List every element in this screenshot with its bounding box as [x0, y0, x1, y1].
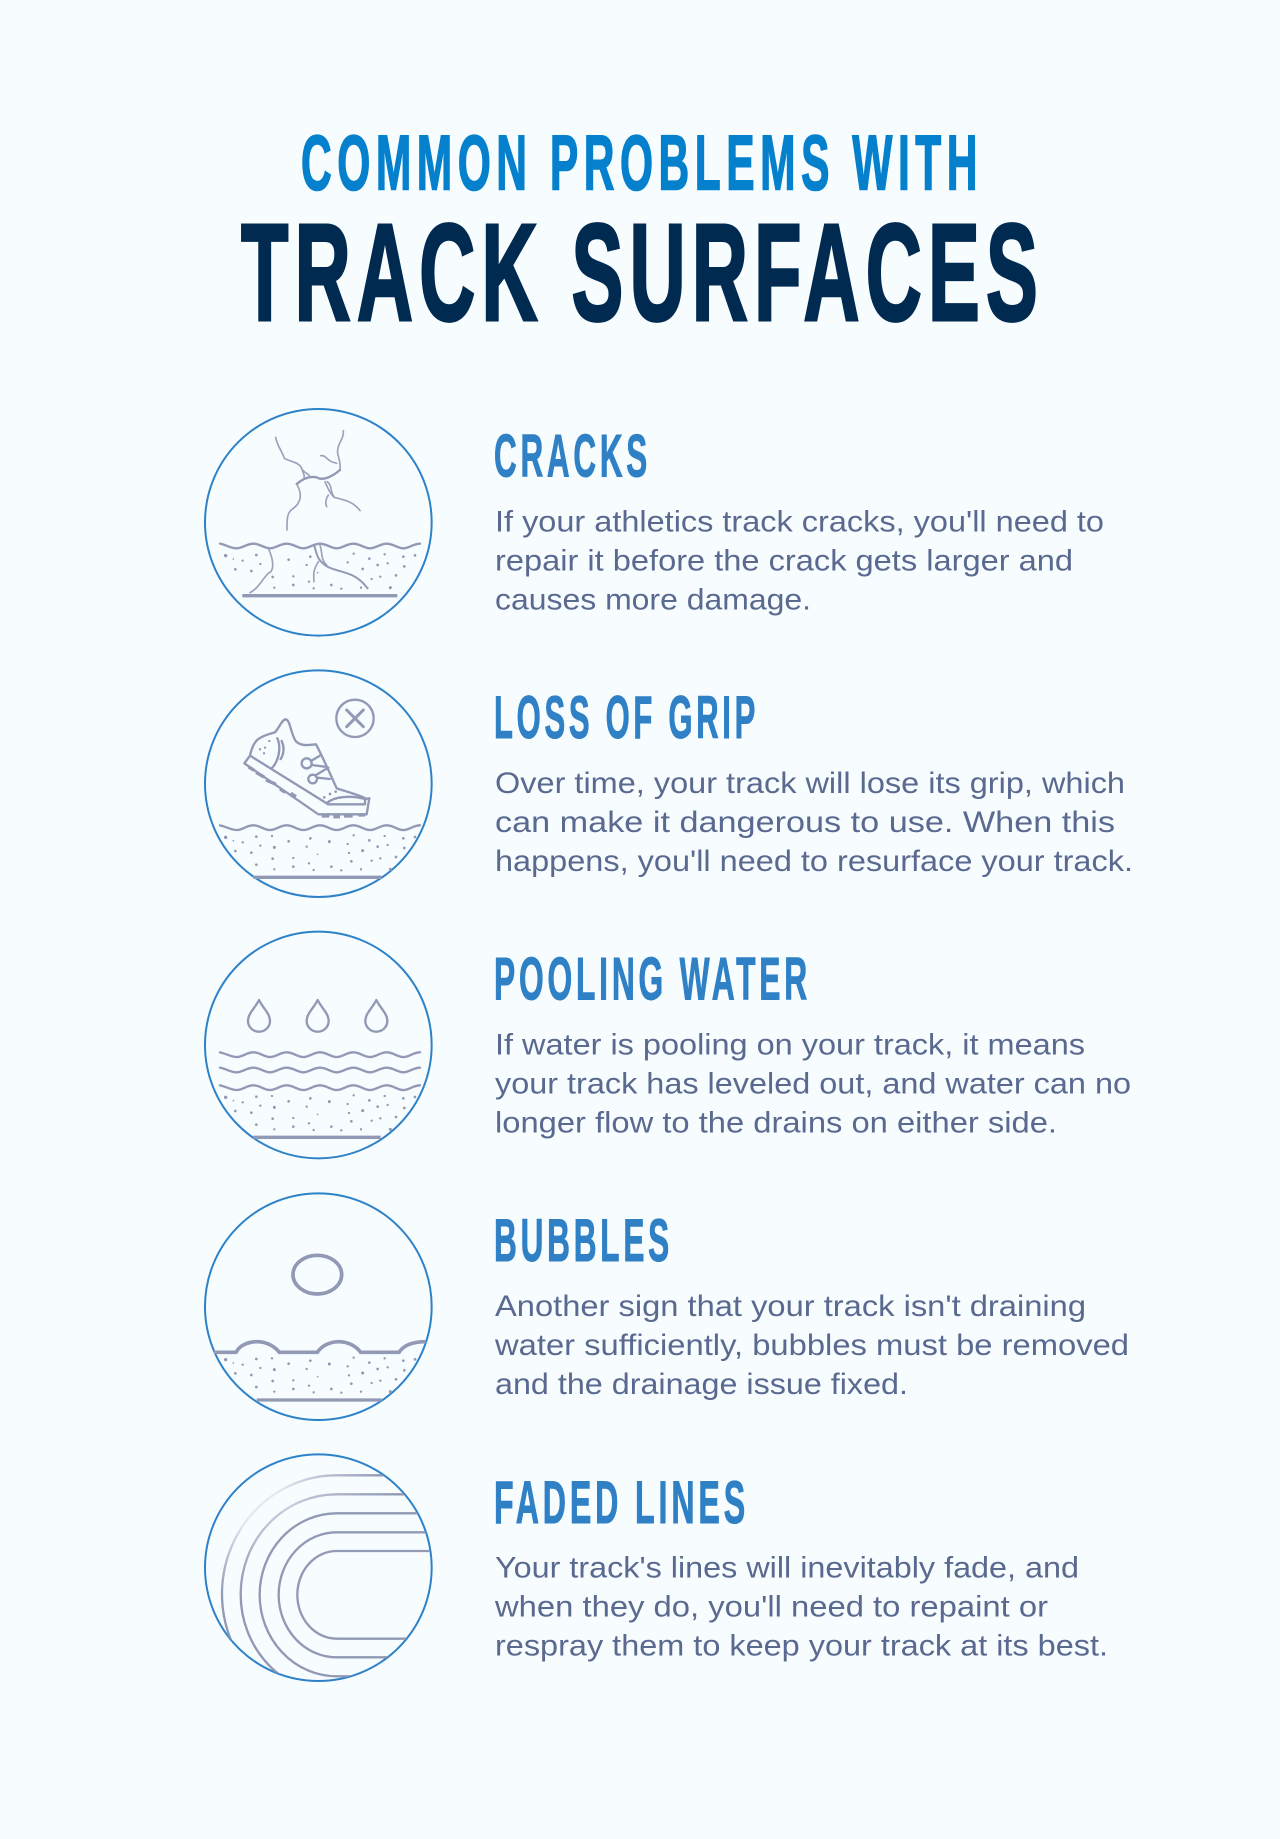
text: pooling water description: If water is pooling on your track, it means — [495, 1028, 1085, 1062]
text: pooling water description: your track has leveled out, and water can no — [495, 1068, 1131, 1100]
text: cracks description: repair it before the crack gets larger and — [495, 544, 1073, 578]
icon: faded track lines — [204, 1453, 433, 1682]
text: loss of grip description — [495, 767, 1133, 878]
text: bubbles description: water sufficiently, bubbles must be removed — [494, 1329, 1129, 1362]
infographic — [204, 134, 1130, 1682]
text: faded lines description: when they do, you'll need to repaint or — [494, 1590, 1048, 1624]
panel: loss of grip — [205, 670, 1133, 897]
heading: bubbles: BUBBLES — [494, 1207, 673, 1274]
icon: bubbles — [205, 1193, 432, 1420]
text: bubbles description — [494, 1290, 1129, 1401]
title — [241, 118, 1044, 350]
text: faded lines description — [494, 1552, 1108, 1662]
text: faded lines description: respray them to keep your track at its best. — [495, 1630, 1108, 1662]
heading: cracks: CRACKS — [494, 422, 651, 490]
text: loss of grip description: Over time, your track will lose its grip, which — [495, 767, 1125, 800]
panel: pooling water — [205, 932, 1131, 1158]
heading: pooling water: POOLING WATER — [494, 946, 811, 1012]
heading: loss of grip: LOSS OF GRIP — [494, 684, 759, 751]
text: loss of grip description: happens, you'll need to resurface your track. — [495, 845, 1133, 878]
panel: cracks — [205, 409, 1104, 636]
panel: bubbles — [205, 1193, 1129, 1420]
text: bubbles description: Another sign that your track isn't draining — [495, 1290, 1086, 1323]
text: pooling water description — [495, 1028, 1131, 1140]
text: cracks description: If your athletics track cracks, you'll need to — [495, 506, 1104, 538]
text: bubbles description: and the drainage issue fixed. — [495, 1368, 908, 1401]
text: loss of grip description: can make it dangerous to use. When this — [495, 806, 1115, 839]
panel: faded lines — [204, 1453, 1106, 1682]
text: cracks description: causes more damage. — [495, 584, 811, 616]
icon: water drops and waves — [205, 932, 432, 1158]
text: cracks description — [495, 506, 1104, 616]
icon: cracks — [205, 409, 432, 636]
text: pooling water description: longer flow to the drains on either side. — [495, 1106, 1057, 1140]
icon: running shoe with x mark — [205, 670, 432, 897]
heading: faded lines: FADED LINES — [494, 1469, 749, 1536]
text: faded lines description: Your track's lines will inevitably fade, and — [495, 1552, 1079, 1584]
